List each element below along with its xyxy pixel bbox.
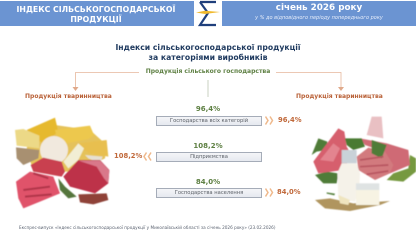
category box <box>156 152 262 162</box>
row 3: households <box>156 178 301 198</box>
header band right: period <box>222 1 416 26</box>
arrow: central down <box>208 80 209 97</box>
icon: sigma logo <box>196 0 220 26</box>
livestock value: 84,0% <box>277 188 301 196</box>
title <box>17 4 176 24</box>
chevrons <box>143 152 152 161</box>
chevrons <box>265 188 274 197</box>
row 1: all farm categories <box>156 105 302 126</box>
image: cheese and red meat <box>14 117 110 209</box>
arrow: to left livestock label <box>72 72 139 91</box>
category box <box>156 188 262 198</box>
period subtitle: у % до відповідного періоду попереднього року <box>255 14 383 20</box>
value 96,4: 96,4% <box>196 105 220 113</box>
footer source note: Експрес-випуск «Індекс сільськогосподарської продукції у Миколаївській області за січень 2026 року» (23.02.2026) <box>19 225 275 230</box>
central label: agricultural production: Продукція сільського господарства <box>146 68 270 75</box>
main heading: за категоріями виробників <box>149 53 267 62</box>
chevrons <box>265 116 274 125</box>
period heading: січень 2026 року <box>276 3 362 13</box>
right livestock label: Продукція тваринництва <box>296 92 383 100</box>
category box: Господарства населення <box>175 190 243 196</box>
title: ІНДЕКС СІЛЬСЬКОГОСПОДАРСЬКОЇ <box>17 5 175 14</box>
title: ПРОДУКЦІЇ <box>70 14 122 24</box>
arrow: to right livestock label <box>276 72 344 91</box>
left livestock label: Продукція тваринництва <box>25 92 112 100</box>
value 108,2: 108,2% <box>193 142 223 150</box>
category box: Підприємства <box>190 154 228 160</box>
row 2: enterprises <box>114 142 262 162</box>
main heading <box>115 43 301 62</box>
livestock value: 96,4% <box>278 116 302 124</box>
header band left: title <box>0 1 194 26</box>
category box <box>156 116 262 126</box>
value 84,0: 84,0% <box>196 178 220 186</box>
livestock value: 108,2% <box>114 152 142 160</box>
main heading: Індекси сільськогосподарської продукції <box>115 43 301 52</box>
image: meat, sausages and milk <box>311 116 416 212</box>
category box: Господарства всіх категорій <box>170 118 248 124</box>
